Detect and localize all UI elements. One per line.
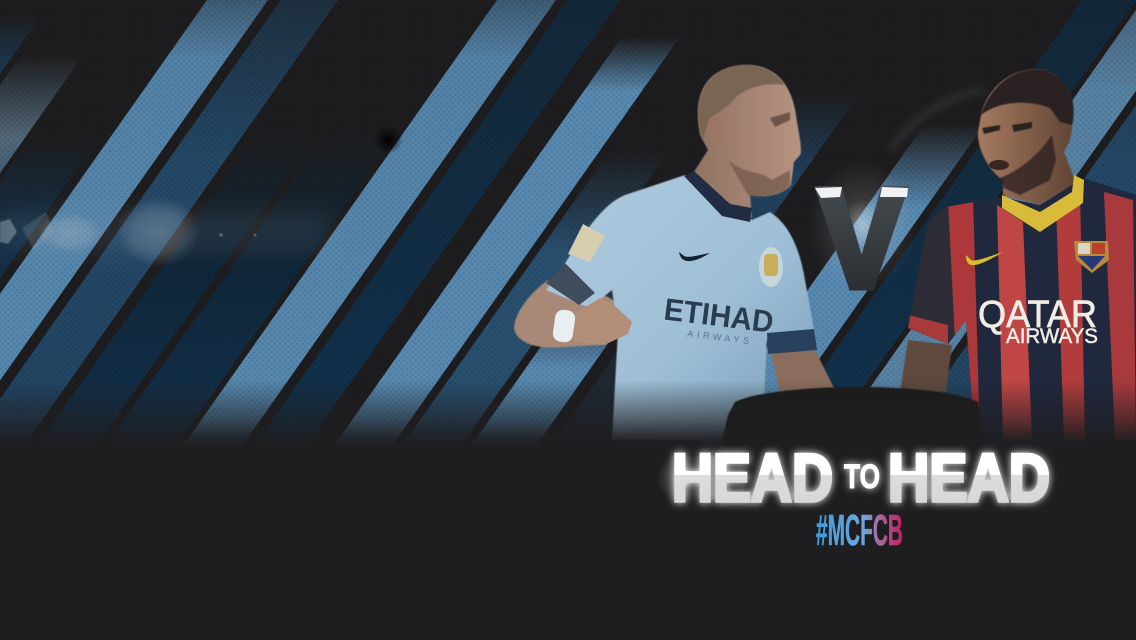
Barca head and neck — [978, 69, 1076, 205]
title: head to head: TO — [844, 458, 880, 496]
City fist — [568, 298, 632, 345]
title: head to head: HEAD — [888, 440, 1050, 516]
City left arm — [514, 280, 632, 348]
title: head to head: HEAD — [672, 440, 833, 516]
City right forearm — [770, 350, 834, 392]
lens flare and shadow spot — [0, 126, 403, 267]
metal V: V — [818, 160, 904, 316]
player: Barcelona — [900, 69, 1136, 445]
City ear — [707, 115, 723, 145]
City sleeve band left — [546, 263, 595, 305]
City shirt — [546, 175, 815, 440]
diagonal blue stripes — [0, 0, 1136, 460]
title: head to head — [657, 440, 1050, 516]
City hair — [699, 65, 785, 140]
Etihad sponsor: ETIHAD — [662, 292, 776, 340]
Qatar sponsor: QATAR — [978, 294, 1097, 336]
Barca shirt — [900, 175, 1136, 445]
City wristband — [552, 309, 576, 343]
star flare — [657, 452, 709, 504]
bottom fade — [0, 380, 1136, 448]
Qatar sponsor: AIRWAYS — [1006, 325, 1098, 348]
Barca eye and brow — [982, 122, 1032, 134]
Barca hair — [981, 69, 1074, 125]
glow behind V — [807, 90, 985, 290]
City head and neck — [690, 65, 801, 218]
Nike swoosh on City shirt — [679, 252, 710, 261]
player: Manchester City — [514, 65, 834, 440]
Barca mouth — [989, 160, 1009, 170]
Barca beard — [1000, 135, 1056, 195]
City sleeve band right — [767, 329, 817, 354]
City beard shade — [728, 160, 790, 196]
City eye and brow — [770, 112, 790, 127]
stadium silhouette — [720, 387, 985, 450]
Barca arm — [900, 340, 952, 392]
City crest — [759, 247, 783, 287]
Barca crest — [1074, 241, 1109, 273]
League badge — [568, 224, 605, 262]
City collar — [684, 171, 752, 222]
text: #MCFCB — [816, 506, 903, 555]
Nike swoosh on Barca shirt — [966, 252, 1003, 265]
lower background — [0, 447, 1136, 640]
Etihad sponsor: AIRWAYS — [687, 328, 750, 346]
Barca yellow collar — [1002, 175, 1084, 232]
